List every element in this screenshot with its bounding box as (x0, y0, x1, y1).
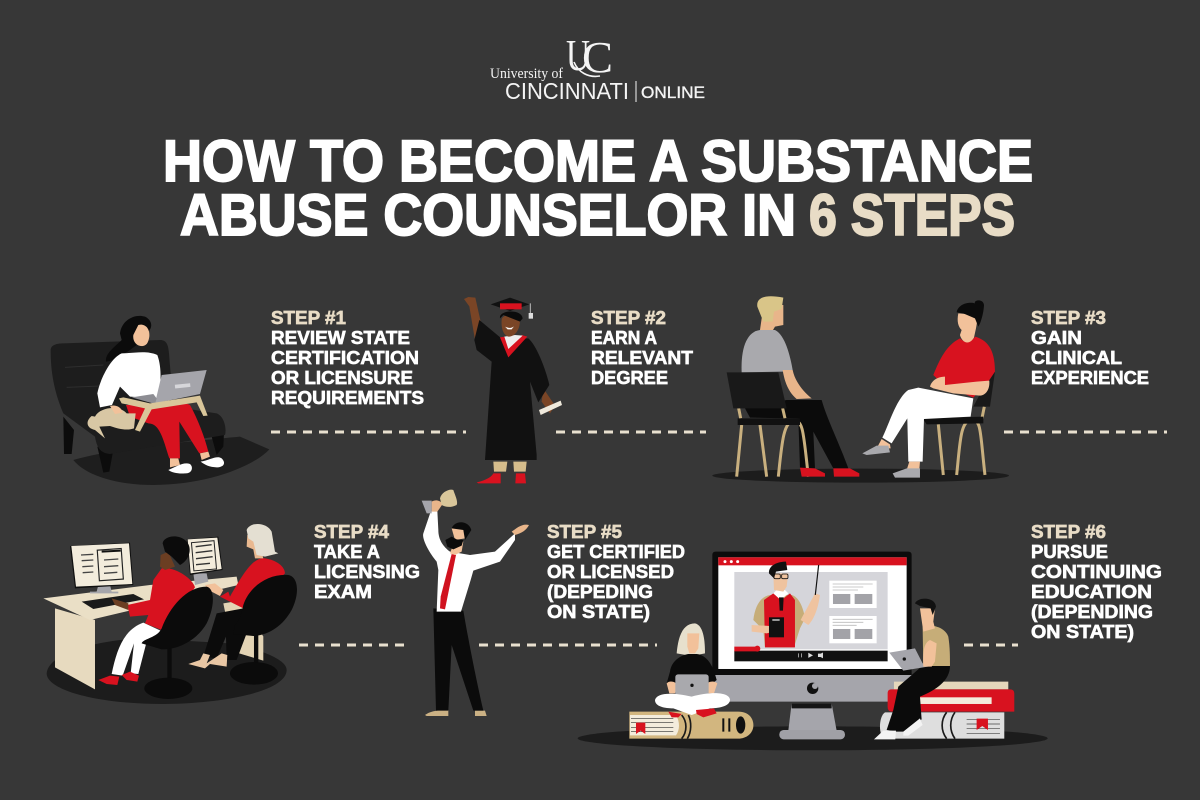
logo: University of Cincinnati Online: C (582, 33, 613, 82)
monitor 2 (193, 573, 208, 585)
dashed connector step 6 (964, 644, 1018, 646)
step 2 text: RELEVANT (591, 347, 694, 368)
step 5 text: ON STATE) (547, 601, 650, 622)
monitor 1 (90, 585, 118, 593)
logo: University of Cincinnati Online: CINCINNATI (505, 78, 629, 104)
step 1 text: REQUIREMENTS (271, 387, 424, 408)
slides (829, 581, 877, 608)
step 4 text: TAKE A (314, 541, 380, 562)
step 2 illustration: graduate in gown (464, 297, 562, 483)
step 2 text: STEP #2 (591, 307, 666, 328)
sweater (97, 352, 161, 407)
title: ABUSE COUNSELOR IN (180, 183, 796, 248)
person 2 (203, 608, 270, 660)
step 5 text: GET CERTIFIED (547, 541, 685, 562)
step 1 text: CERTIFICATION (271, 347, 419, 368)
monitor stand (788, 703, 837, 731)
logo: University of Cincinnati Online: ONLINE (641, 83, 705, 102)
step 3 text: STEP #3 (1031, 307, 1106, 328)
step 2 text: DEGREE (591, 367, 668, 388)
dashed connector step 3 onward (1004, 430, 1167, 434)
title: 6 STEPS (809, 183, 1015, 248)
hair (106, 316, 151, 362)
step 5 text: STEP #5 (547, 521, 622, 542)
laptop (155, 370, 207, 403)
step 5 illustration: man raising trophy (422, 490, 529, 716)
man legs and torso (887, 665, 950, 732)
step 3 illustration: counselor and client seated on chairs (712, 296, 1009, 483)
desk (223, 600, 263, 661)
step 4 text: LICENSING (314, 561, 420, 582)
step 4 text: STEP #4 (314, 521, 390, 542)
step 6 text: EDUCATION (1031, 581, 1152, 602)
step 6 text: STEP #6 (1031, 521, 1106, 542)
step 6 text: (DEPENDING (1031, 601, 1153, 622)
cat (88, 408, 136, 438)
step 1 illustration: woman on armchair with laptop and cat (51, 316, 269, 485)
dashed connector step 2 to step 3 (556, 430, 706, 434)
step 5 text: (DEPEDING (547, 581, 653, 602)
step 6 text (1031, 521, 1162, 642)
man (760, 305, 783, 332)
step 5 text: OR LICENSED (547, 561, 674, 582)
step 4 text: EXAM (314, 581, 372, 602)
step 4 text (314, 521, 420, 602)
step 1 text: STEP #1 (271, 307, 346, 328)
chairs (167, 633, 258, 683)
logo: University of Cincinnati Online: University of (490, 66, 563, 82)
step 6 text: CONTINUING (1031, 561, 1162, 582)
right books and student (894, 682, 1008, 689)
title: HOW TO BECOME A SUBSTANCE (163, 129, 1033, 194)
logo: University of Cincinnati Online (490, 31, 705, 104)
step 4 illustration: two people taking an exam at computers (43, 524, 297, 704)
woman (938, 407, 985, 475)
dashed connector step 4 to step 5 (299, 644, 408, 646)
step 3 text: EXPERIENCE (1031, 367, 1149, 388)
lap desk (119, 396, 208, 432)
step 6 text: ON STATE) (1031, 621, 1134, 642)
monitor (712, 552, 912, 675)
teacher (753, 595, 805, 647)
step 3 text: GAIN (1031, 327, 1082, 348)
step 1 text (271, 307, 424, 408)
dashed connector step 1 to step 2 (271, 430, 466, 434)
person 1 (112, 623, 163, 676)
step 3 text: CLINICAL (1031, 347, 1122, 368)
step 3 text (1031, 307, 1149, 388)
step 5 text (547, 521, 685, 622)
step 1 text: REVIEW STATE (271, 327, 410, 348)
step 2 text (591, 307, 694, 388)
title (163, 129, 1033, 248)
step 1 text: OR LICENSURE (271, 367, 413, 388)
step 2 text: EARN A (591, 327, 657, 348)
step 6 illustration: online learning on large monitor with students on books (578, 552, 1048, 750)
step 6 text: PURSUE (1031, 541, 1108, 562)
left book and student (629, 712, 753, 739)
logo: University of Cincinnati Online: U (566, 31, 590, 80)
dashed connector step 5 to step 6 (479, 644, 657, 646)
